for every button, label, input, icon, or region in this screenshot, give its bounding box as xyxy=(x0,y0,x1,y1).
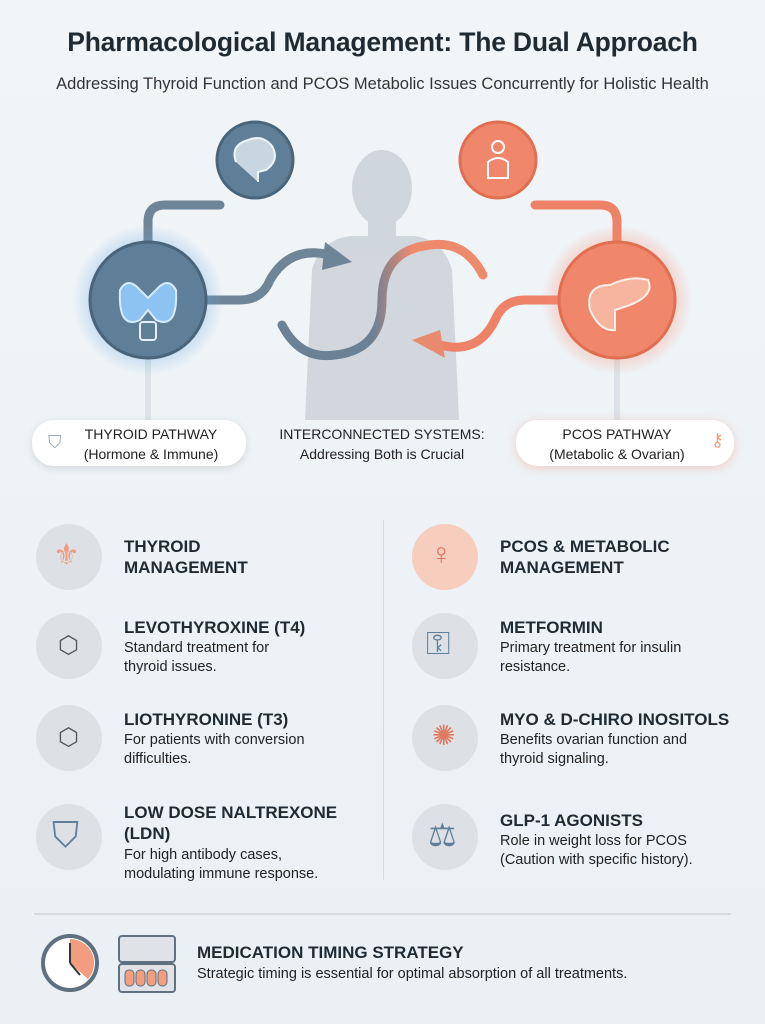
label: thyroid pathway: THYROID PATHWAY xyxy=(85,426,217,442)
heading: thyroid management: ⚜ xyxy=(53,539,80,572)
item: inositols xyxy=(412,705,729,771)
human silhouette xyxy=(305,150,459,420)
item: glp-1: (Caution with specific history). xyxy=(500,852,693,868)
label: interconnected systems: Addressing Both is Crucial xyxy=(300,446,464,462)
item: ldn: ⛉ xyxy=(52,814,79,855)
arrowheads xyxy=(322,242,352,270)
heading: pcos xyxy=(412,524,670,590)
label: pcos pathway xyxy=(516,420,734,466)
item: glp-1 xyxy=(412,804,693,870)
label: thyroid pathway xyxy=(32,420,246,466)
item: metformin: resistance. xyxy=(500,659,570,675)
heading: thyroid management xyxy=(36,524,248,590)
item: metformin: METFORMIN xyxy=(500,618,603,637)
heading: thyroid management: THYROID xyxy=(124,537,200,556)
divider bottom xyxy=(34,913,731,915)
item: levothyroxine: thyroid issues. xyxy=(124,659,217,675)
item: liothyronine: difficulties. xyxy=(124,751,191,767)
heading: pcos: MANAGEMENT xyxy=(500,558,624,577)
item: inositols: MYO & D-CHIRO INOSITOLS xyxy=(500,710,729,729)
item: levothyroxine: Standard treatment for xyxy=(124,640,269,656)
bottom callout: timing: MEDICATION TIMING STRATEGY xyxy=(197,943,464,962)
label: thyroid pathway: ⛉ xyxy=(48,432,62,452)
label: pcos pathway: ⚷ xyxy=(711,430,724,450)
label: interconnected systems: INTERCONNECTED SYSTEMS: xyxy=(279,426,485,442)
item: levothyroxine xyxy=(36,613,305,679)
icon: pancreas circle xyxy=(542,225,692,375)
item: liothyronine: For patients with conversion xyxy=(124,732,305,748)
item: metformin: Primary treatment for insulin xyxy=(500,640,681,656)
item: glp-1: Role in weight loss for PCOS xyxy=(500,833,687,849)
item: ldn: For high antibody cases, xyxy=(124,847,282,863)
heading: thyroid management: MANAGEMENT xyxy=(124,558,248,577)
heading: pcos: ♀ xyxy=(430,538,452,571)
title: Pharmacological Management: The Dual Approach xyxy=(67,27,698,57)
item: glp-1: GLP-1 AGONISTS xyxy=(500,811,643,830)
item: ldn xyxy=(36,803,337,882)
item: ldn: modulating immune response. xyxy=(124,866,318,882)
heading: pcos: PCOS & METABOLIC xyxy=(500,537,670,556)
item: inositols: ✺ xyxy=(432,720,455,751)
label: interconnected systems xyxy=(279,426,485,462)
item: liothyronine: ⬡ xyxy=(58,724,79,751)
item: inositols: Benefits ovarian function and xyxy=(500,732,687,748)
top diagram xyxy=(76,120,688,420)
item: liothyronine xyxy=(36,705,305,771)
icon: pill box xyxy=(118,935,176,993)
icon: clock xyxy=(41,934,99,992)
item: glp-1: ⚖ xyxy=(428,817,457,853)
connectors xyxy=(148,205,617,420)
item: metformin xyxy=(412,613,681,679)
icon: thyroid circle xyxy=(73,225,223,375)
item: ldn: LOW DOSE NALTREXONE xyxy=(124,803,337,822)
label: pcos pathway: PCOS PATHWAY xyxy=(562,426,672,442)
panel: thyroid management xyxy=(36,524,337,882)
icon: person circle xyxy=(460,122,536,198)
item: levothyroxine: LEVOTHYROXINE (T4) xyxy=(124,618,305,637)
item: liothyronine: LIOTHYRONINE (T3) xyxy=(124,710,288,729)
item: ldn: (LDN) xyxy=(124,824,170,843)
item: inositols: thyroid signaling. xyxy=(500,751,609,767)
bottom callout: timing: Strategic timing is essential for optimal absorption of all treatments. xyxy=(197,966,627,982)
label: thyroid pathway: (Hormone & Immune) xyxy=(84,446,218,462)
icon: brain circle xyxy=(217,122,293,198)
bottom callout: timing xyxy=(197,943,627,982)
panel: pcos management xyxy=(412,524,729,870)
item: metformin: ⚿ xyxy=(426,625,450,661)
subtitle: Addressing Thyroid Function and PCOS Metabolic Issues Concurrently for Holistic Health xyxy=(56,75,709,93)
item: levothyroxine: ⬡ xyxy=(58,632,79,659)
label: pcos pathway: (Metabolic & Ovarian) xyxy=(549,446,685,462)
divider xyxy=(383,520,384,880)
